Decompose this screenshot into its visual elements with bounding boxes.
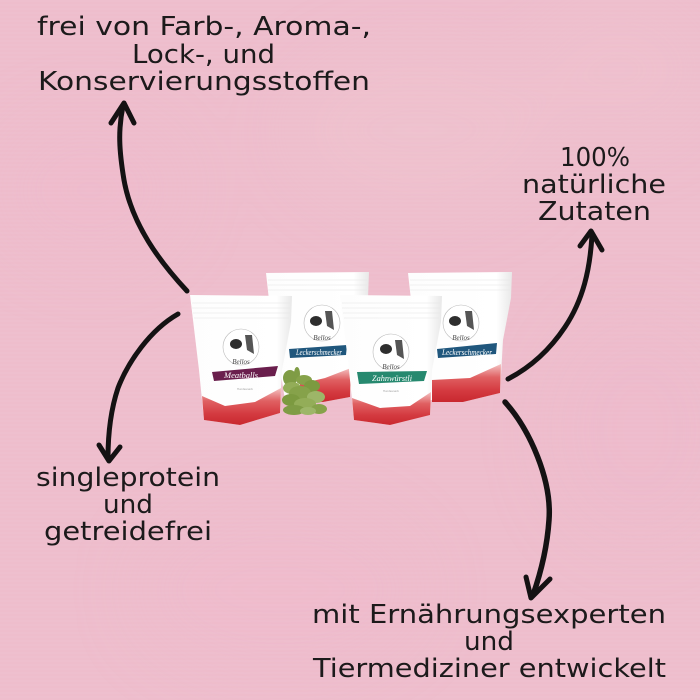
pouch: back left, Leckerschmecker: Leckerschmecker [295, 348, 343, 357]
pouch: front left, Meatballs: Hundesnack [237, 387, 253, 391]
text: 100% natürliche Zutaten [522, 143, 666, 227]
text: singleprotein und getreidefrei [36, 463, 220, 547]
pouch: front center, Zahnwürstli: Bellos [382, 363, 400, 371]
pouch: back right, Leckerschmecker [408, 272, 512, 402]
arrow: to top-left text [111, 103, 187, 291]
pouch: front left, Meatballs [190, 295, 292, 425]
text: singleprotein und getreidefrei: und [103, 490, 153, 520]
text: mit Ernährungsexperten und Tiermediziner entwickelt: und [464, 627, 514, 657]
pouch: front center, Zahnwürstli: Hundesnack [383, 389, 399, 393]
arrow: to bottom text [505, 402, 550, 598]
text: frei von Farb-, Aroma-, Lock-, und Konservierungsstoffen: Lock-, und [132, 40, 275, 70]
text: frei von Farb-, Aroma-, Lock-, und Konservierungsstoffen: Konservierungsstoffen [38, 67, 370, 97]
text: 100% natürliche Zutaten: Zutaten [538, 197, 651, 227]
text: mit Ernährungsexperten und Tiermediziner entwickelt [312, 600, 666, 684]
text: mit Ernährungsexperten und Tiermediziner entwickelt: mit Ernährungsexperten [312, 600, 666, 630]
pouch: front left, Meatballs: Meatballs [223, 371, 258, 380]
pouch: front center, Zahnwürstli: Zahnwürstli [372, 374, 412, 383]
text: mit Ernährungsexperten und Tiermediziner entwickelt: Tiermediziner entwickelt [312, 654, 666, 684]
pouch: back left, Leckerschmecker: Bellos [313, 334, 331, 342]
text: frei von Farb-, Aroma-, Lock-, und Konservierungsstoffen [37, 12, 371, 97]
pouch: front center, Zahnwürstli [340, 295, 442, 425]
pouch: back right, Leckerschmecker: Leckerschmecker [441, 348, 493, 357]
text: frei von Farb-, Aroma-, Lock-, und Konservierungsstoffen: frei von Farb-, Aroma-, [37, 12, 371, 42]
text: singleprotein und getreidefrei: singleprotein [36, 463, 220, 493]
pouch: front left, Meatballs: Bellos [232, 358, 250, 366]
plant: green herb sprig [282, 367, 327, 415]
text: singleprotein und getreidefrei: getreidefrei [44, 517, 212, 547]
arrow: to right text [508, 231, 602, 379]
pouch: back left, Leckerschmecker [266, 272, 369, 402]
text: 100% natürliche Zutaten: 100% [560, 143, 630, 173]
arrow: to left text [99, 314, 178, 461]
pouch: back right, Leckerschmecker: Bellos [452, 334, 470, 342]
text: 100% natürliche Zutaten: natürliche [522, 170, 666, 200]
product group: four pouches [190, 272, 512, 425]
